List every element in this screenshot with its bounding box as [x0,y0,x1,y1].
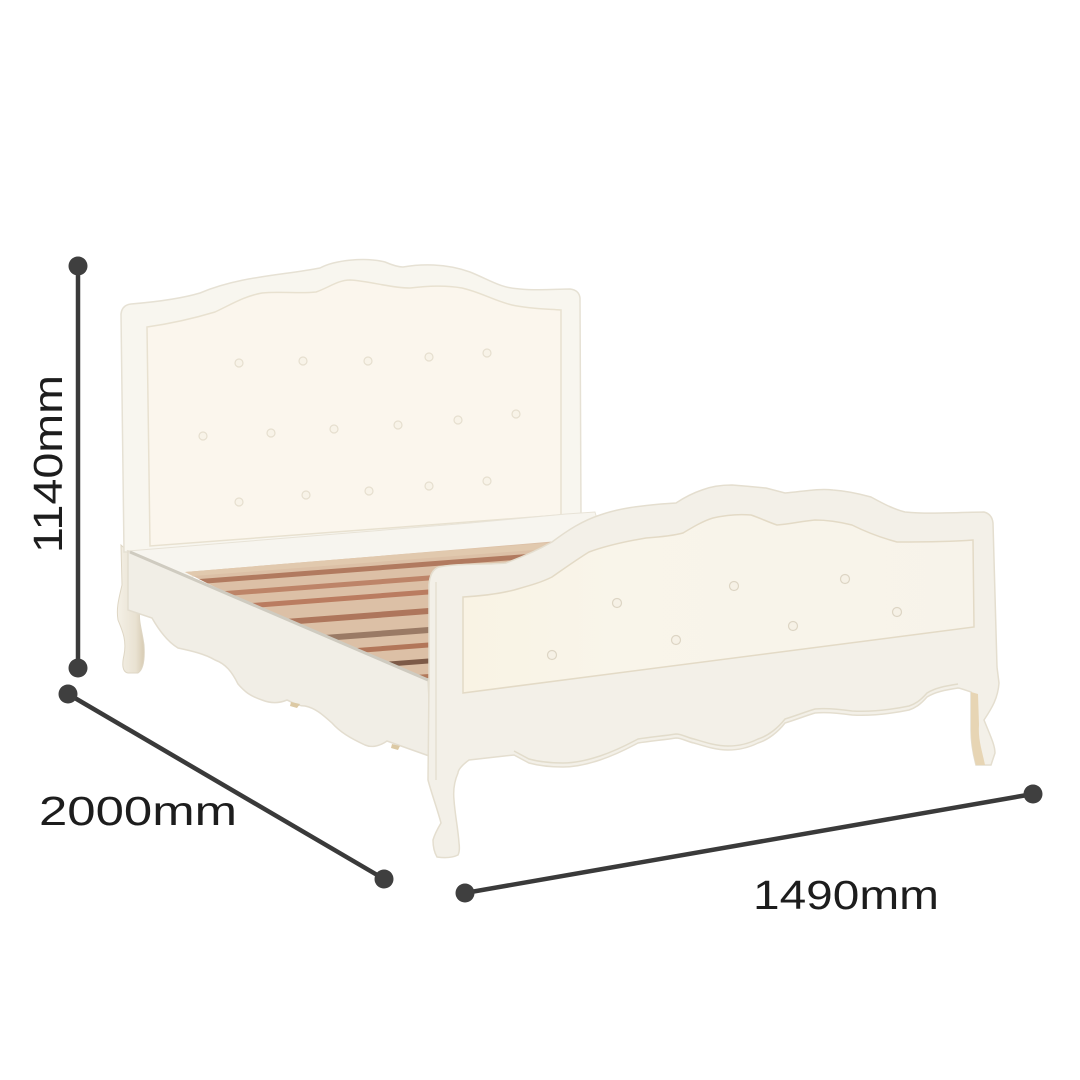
length label: 2000mm [39,788,237,834]
height dimension line [68,256,88,678]
height label: 1140mm [25,375,71,553]
headboard tufting buttons [199,349,520,506]
footboard lower moulding [514,684,958,763]
rail bracket details [290,702,400,750]
side rail top edge [130,552,428,680]
footboard left moulding [435,582,437,780]
left back leg [117,545,148,673]
width label: 1490mm [753,872,939,918]
infographic: bed dimensions [34,256,1042,910]
footboard right leg inner [971,692,985,765]
footboard tufting buttons [548,574,902,660]
length dimension line [58,684,394,888]
headboard [121,260,581,552]
footboard upholstery [463,515,974,693]
wooden slats [185,542,552,680]
headboard upholstery [147,280,561,546]
headboard frame [121,260,581,552]
width dimension line [456,784,1042,902]
footboard frame [428,485,999,858]
side rail [128,551,432,757]
headboard rail [128,512,600,582]
footboard [428,485,999,858]
